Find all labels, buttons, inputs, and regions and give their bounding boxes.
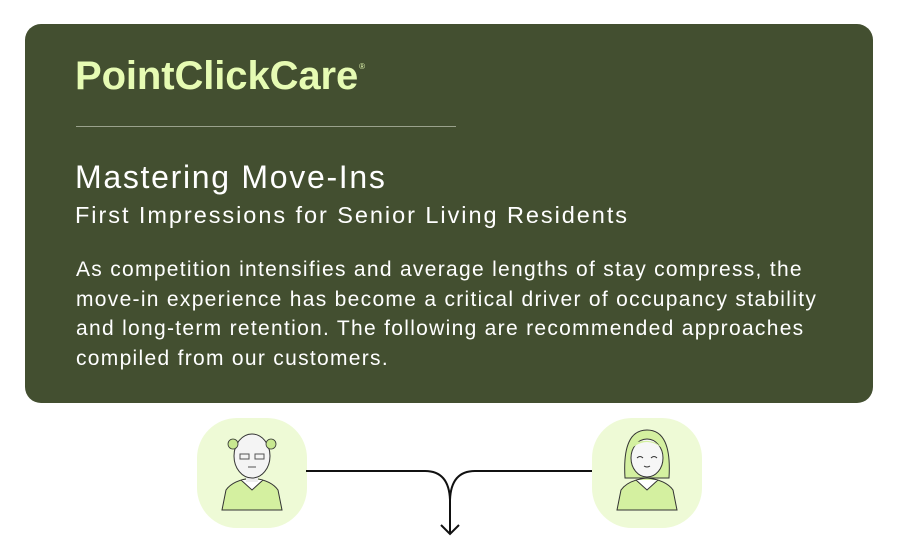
panel: header (25, 24, 873, 403)
icon: older man (197, 418, 307, 528)
logo: PointClickCare® (75, 54, 365, 98)
intro text: compiled from our customers. (76, 346, 389, 370)
intro text: move-in experience has become a critical driver of occupancy stability (76, 288, 817, 310)
subtitle: First Impressions for Senior Living Residents (75, 202, 629, 228)
intro text: and long-term retention. The following are recommended approaches (76, 317, 804, 340)
icon: woman (592, 418, 702, 528)
title: Mastering Move-Ins (75, 159, 387, 195)
intro text: As competition intensifies and average lengths of stay compress, the (76, 258, 803, 281)
intro text (76, 258, 817, 370)
